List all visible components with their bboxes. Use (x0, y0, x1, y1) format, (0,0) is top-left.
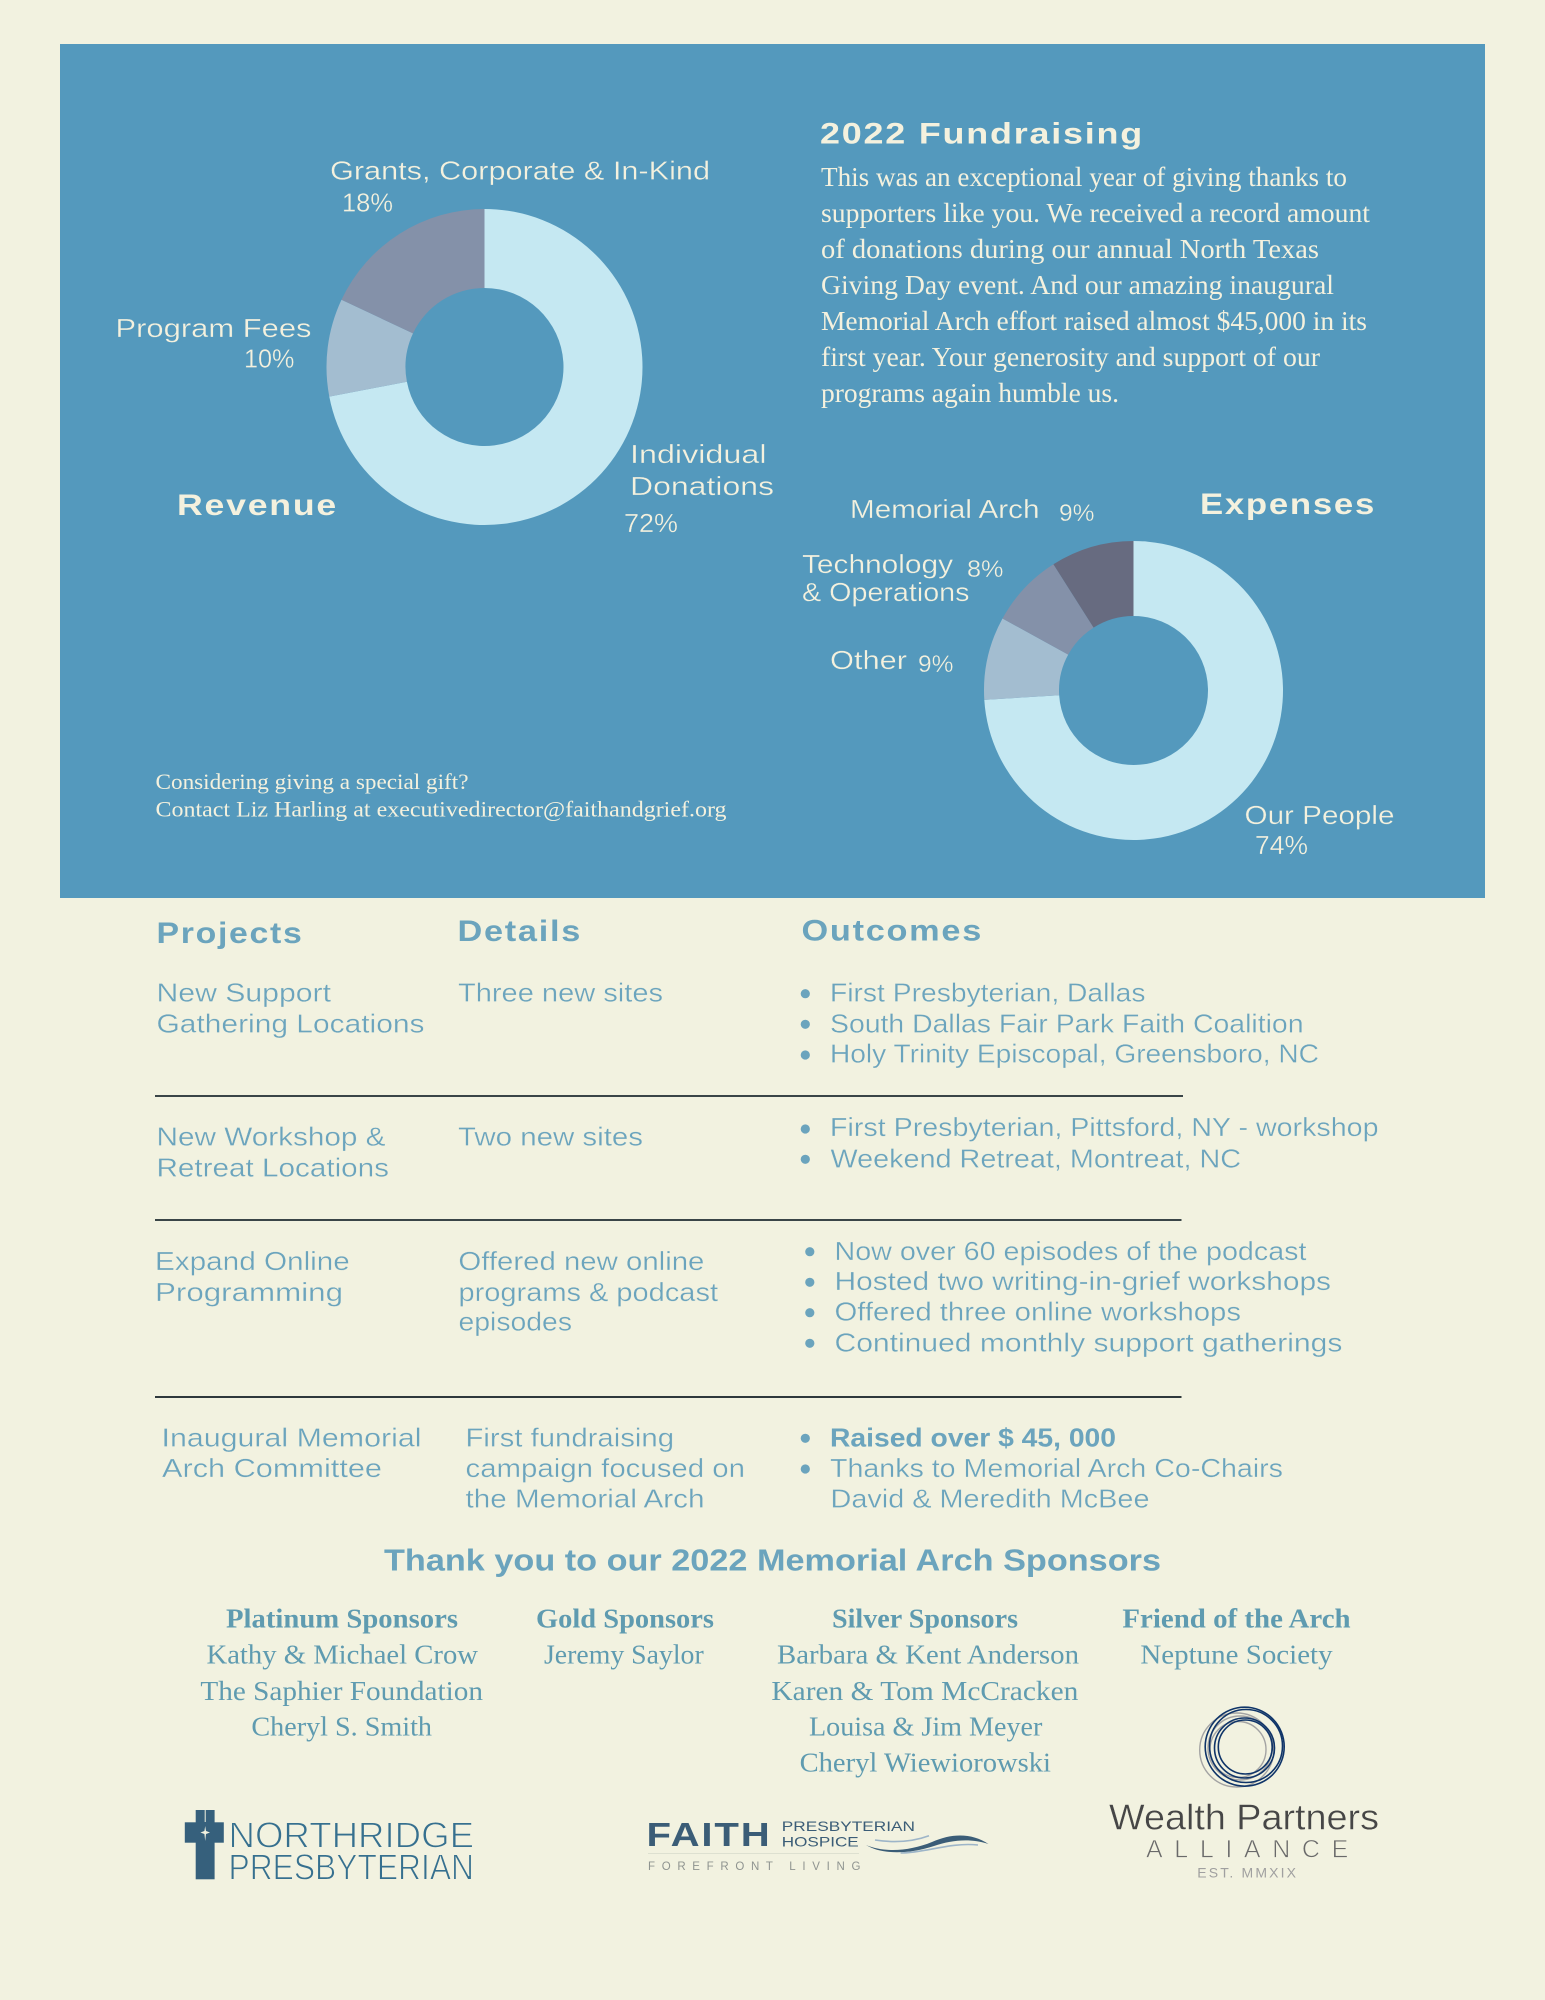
label: individual donations: Donations (630, 471, 774, 501)
logo: Faith Presbyterian Hospice: FAITH (646, 1816, 772, 1853)
row: expand online programming: Programming (155, 1277, 343, 1307)
row: inaugural memorial arch committee: the Memorial Arch (466, 1483, 704, 1513)
row: new workshop and retreat locations: New Workshop & (156, 1122, 386, 1152)
logo: Faith Presbyterian Hospice (646, 1816, 988, 1873)
row: inaugural memorial arch committee: David & Meredith McBee (830, 1483, 1150, 1513)
fundraising paragraph: first year. Your generosity and support of our (821, 341, 1320, 372)
sponsors: platinum: The Saphier Foundation (200, 1676, 484, 1706)
sponsors: silver: Silver Sponsors (832, 1604, 1018, 1634)
fundraising paragraph: Giving Day event. And our amazing inaugural (821, 269, 1334, 300)
segment: other 9% (984, 618, 1068, 700)
label: technology and operations (802, 549, 1004, 607)
panel: fundraising (60, 44, 1485, 898)
label: memorial arch (850, 494, 1094, 527)
row: inaugural memorial arch committee: Thanks to Memorial Arch Co-Chairs (830, 1453, 1283, 1483)
row: new workshop and retreat locations: Two new sites (458, 1122, 643, 1152)
column headings: Outcomes (802, 914, 983, 948)
fundraising paragraph: programs again humble us. (821, 377, 1119, 408)
sponsors: silver: Louisa & Jim Meyer (809, 1712, 1042, 1742)
expenses heading: Expenses (1200, 488, 1376, 521)
row: new support gathering locations: New Support (156, 978, 332, 1008)
sponsors: gold (536, 1604, 714, 1670)
fundraising paragraph: of donations during our annual North Texas (821, 233, 1319, 264)
sponsors: silver: Cheryl Wiewiorowski (800, 1748, 1051, 1778)
label: memorial arch: Memorial Arch (850, 494, 1040, 524)
label: individual donations: Individual (630, 439, 766, 469)
segment: technology 8% (1002, 564, 1094, 655)
row: new workshop and retreat locations (156, 1112, 1378, 1182)
fundraising paragraph: This was an exceptional year of giving thanks to (821, 161, 1347, 192)
segment: our people 74% (984, 541, 1283, 840)
row: inaugural memorial arch committee: campaign focused on (466, 1453, 745, 1483)
label: grants: 18% (342, 188, 393, 218)
label: our people: 74% (1255, 830, 1308, 860)
row: new support gathering locations: Three new sites (458, 978, 663, 1008)
row: inaugural memorial arch committee: First fundraising (466, 1423, 674, 1453)
row: expand online programming: episodes (458, 1307, 572, 1337)
icon: rings (1200, 1707, 1284, 1787)
row: inaugural memorial arch committee (162, 1423, 1283, 1513)
logo: Wealth Partners Alliance: ALLIANCE (1146, 1835, 1348, 1863)
sponsors: silver (771, 1604, 1080, 1778)
logo: Wealth Partners Alliance: EST. MMXIX (1197, 1865, 1297, 1881)
label: individual donations: 72% (624, 508, 678, 538)
fundraising paragraph: Memorial Arch effort raised almost $45,000 in its (821, 305, 1367, 336)
label: technology and operations: Technology (802, 549, 953, 579)
sponsors: friend of the arch: Friend of the Arch (1122, 1604, 1351, 1634)
sponsors heading: Thank you to our 2022 Memorial Arch Sponsors (384, 1543, 1161, 1578)
label: other: 9% (918, 651, 954, 678)
sponsors: friend of the arch: Neptune Society (1140, 1640, 1333, 1670)
row: new support gathering locations: South Dallas Fair Park Faith Coalition (830, 1008, 1304, 1038)
column headings: Projects (156, 917, 304, 950)
row: expand online programming: Continued monthly support gatherings (834, 1328, 1342, 1358)
row: inaugural memorial arch committee: Arch Committee (162, 1453, 382, 1483)
expenses donut chart (984, 541, 1283, 840)
row: expand online programming: Hosted two writing-in-grief workshops (834, 1266, 1331, 1296)
row: expand online programming: programs & podcast (458, 1277, 719, 1307)
row: new support gathering locations (156, 978, 1319, 1068)
label: other (830, 645, 954, 678)
label: technology and operations: 8% (967, 556, 1004, 583)
contact note (156, 769, 726, 822)
row: expand online programming: Now over 60 episodes of the podcast (834, 1236, 1307, 1266)
sponsors: gold: Gold Sponsors (536, 1604, 714, 1634)
column headings: Details (458, 915, 582, 948)
icon: waves (866, 1835, 988, 1853)
contact note: Contact Liz Harling at executivedirector@faithandgrief.org (156, 796, 726, 822)
logo: Faith Presbyterian Hospice: PRESBYTERIAN (782, 1818, 915, 1834)
label: technology and operations: & Operations (802, 577, 970, 607)
row: expand online programming (155, 1236, 1342, 1358)
logo: Wealth Partners Alliance (1109, 1707, 1379, 1881)
label: program fees: 10% (244, 344, 294, 374)
sponsors: platinum: Kathy & Michael Crow (206, 1640, 479, 1670)
sponsors: platinum (200, 1604, 484, 1742)
icon: cross (185, 1810, 224, 1879)
sponsors: platinum: Cheryl S. Smith (251, 1712, 433, 1742)
panel background (60, 44, 1485, 898)
label: grants: Grants, Corporate & In-Kind (330, 156, 710, 186)
revenue donut chart (326, 209, 643, 525)
segment: individual donations 72% (329, 209, 643, 525)
sponsors: gold: Jeremy Saylor (544, 1640, 704, 1670)
row: inaugural memorial arch committee: Inaugural Memorial (162, 1423, 422, 1453)
label: our people (1244, 800, 1394, 860)
row: expand online programming: Offered new online (458, 1246, 704, 1276)
label: memorial arch: 9% (1059, 500, 1094, 527)
contact note: Considering giving a special gift? (156, 769, 468, 794)
row: new support gathering locations: Holy Trinity Episcopal, Greensboro, NC (830, 1038, 1319, 1068)
segment: grants 18% (342, 209, 484, 333)
row: expand online programming: Expand Online (155, 1246, 350, 1276)
column headings (156, 914, 983, 950)
sponsors: silver: Barbara & Kent Anderson (777, 1640, 1080, 1670)
label: our people: Our People (1244, 800, 1394, 830)
table: projects (155, 914, 1378, 1513)
logo: Northridge Presbyterian (185, 1810, 474, 1887)
row: expand online programming: Offered three online workshops (834, 1297, 1241, 1327)
sponsors: friend of the arch (1122, 1604, 1351, 1670)
label: grants (330, 156, 710, 218)
heading: 2022 Fundraising: 2022 Fundraising (820, 118, 1144, 150)
fundraising paragraph: supporters like you. We received a record amount (821, 197, 1370, 228)
row: new workshop and retreat locations: First Presbyterian, Pittsford, NY - workshop (830, 1112, 1378, 1142)
sponsors: silver: Karen & Tom McCracken (771, 1676, 1079, 1706)
label: program fees (116, 313, 312, 374)
label: other: Other (830, 645, 907, 675)
revenue heading: Revenue (177, 489, 338, 522)
segment: program fees 10% (326, 300, 413, 397)
logo: Northridge Presbyterian: PRESBYTERIAN (228, 1846, 474, 1887)
label: program fees: Program Fees (116, 313, 312, 343)
sponsors: platinum: Platinum Sponsors (226, 1604, 458, 1634)
fundraising paragraph (821, 161, 1370, 408)
row: new workshop and retreat locations: Weekend Retreat, Montreat, NC (830, 1143, 1241, 1173)
logo: Faith Presbyterian Hospice: FOREFRONT LIVING (648, 1861, 860, 1873)
logo: Northridge Presbyterian: NORTHRIDGE (228, 1814, 474, 1855)
logo: Faith Presbyterian Hospice: HOSPICE (782, 1834, 859, 1850)
row: new support gathering locations: First Presbyterian, Dallas (830, 978, 1146, 1008)
segment: memorial arch 9% (1053, 541, 1134, 628)
row: inaugural memorial arch committee: Raised over $ 45, 000 (830, 1423, 1116, 1453)
logo: Wealth Partners Alliance: Wealth Partners (1109, 1796, 1379, 1837)
row: new workshop and retreat locations: Retreat Locations (156, 1152, 389, 1182)
row: new support gathering locations: Gathering Locations (156, 1008, 424, 1038)
label: individual donations (624, 439, 774, 538)
